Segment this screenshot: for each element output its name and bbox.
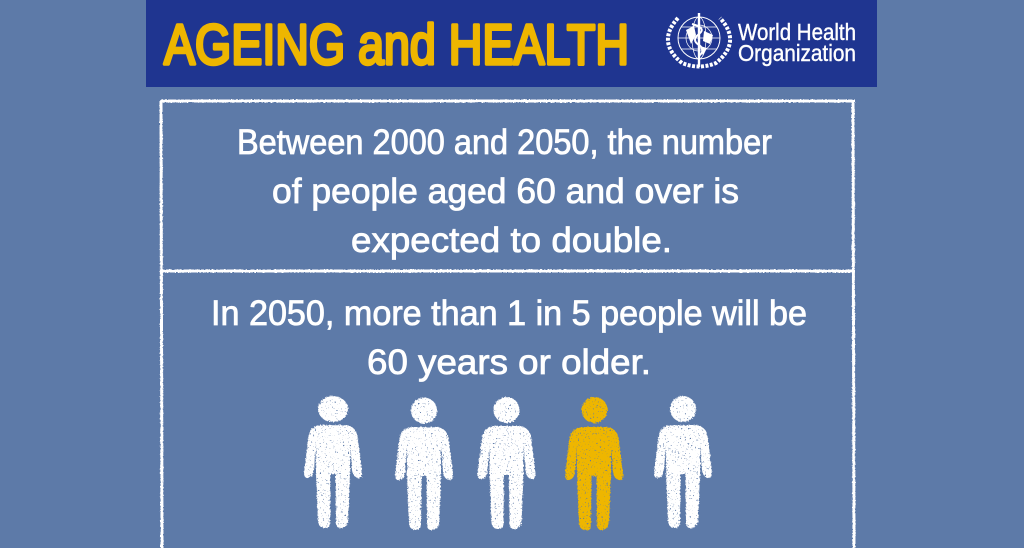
WHO logo text: Organization — [738, 40, 856, 66]
panel: one in five statement: 60 years or older. — [367, 342, 651, 382]
chalk frame — [161, 100, 855, 548]
icon: person 1 — [304, 396, 362, 528]
panel: doubling statement: of people aged 60 and over is — [272, 171, 739, 211]
icon: person 3 — [478, 397, 536, 529]
panel: one in five statement: In 2050, more than 1 in 5 people will be — [211, 293, 807, 333]
WHO logo text: World Health — [738, 19, 856, 45]
panel: doubling statement — [237, 122, 772, 260]
icon: WHO logo emblem — [668, 13, 730, 67]
icon: person 5 — [654, 396, 712, 528]
title: AGEING and HEALTH — [164, 13, 629, 77]
header banner — [146, 0, 877, 87]
icon row: five people, one highlighted — [304, 396, 712, 530]
panel: doubling statement: expected to double. — [351, 220, 672, 260]
icon: person 2 — [395, 398, 453, 530]
WHO logo text — [738, 19, 856, 66]
panel: one in five statement — [211, 293, 807, 382]
panel: doubling statement: Between 2000 and 2050, the number — [237, 122, 772, 162]
icon: person 4 highlighted yellow — [565, 397, 623, 530]
